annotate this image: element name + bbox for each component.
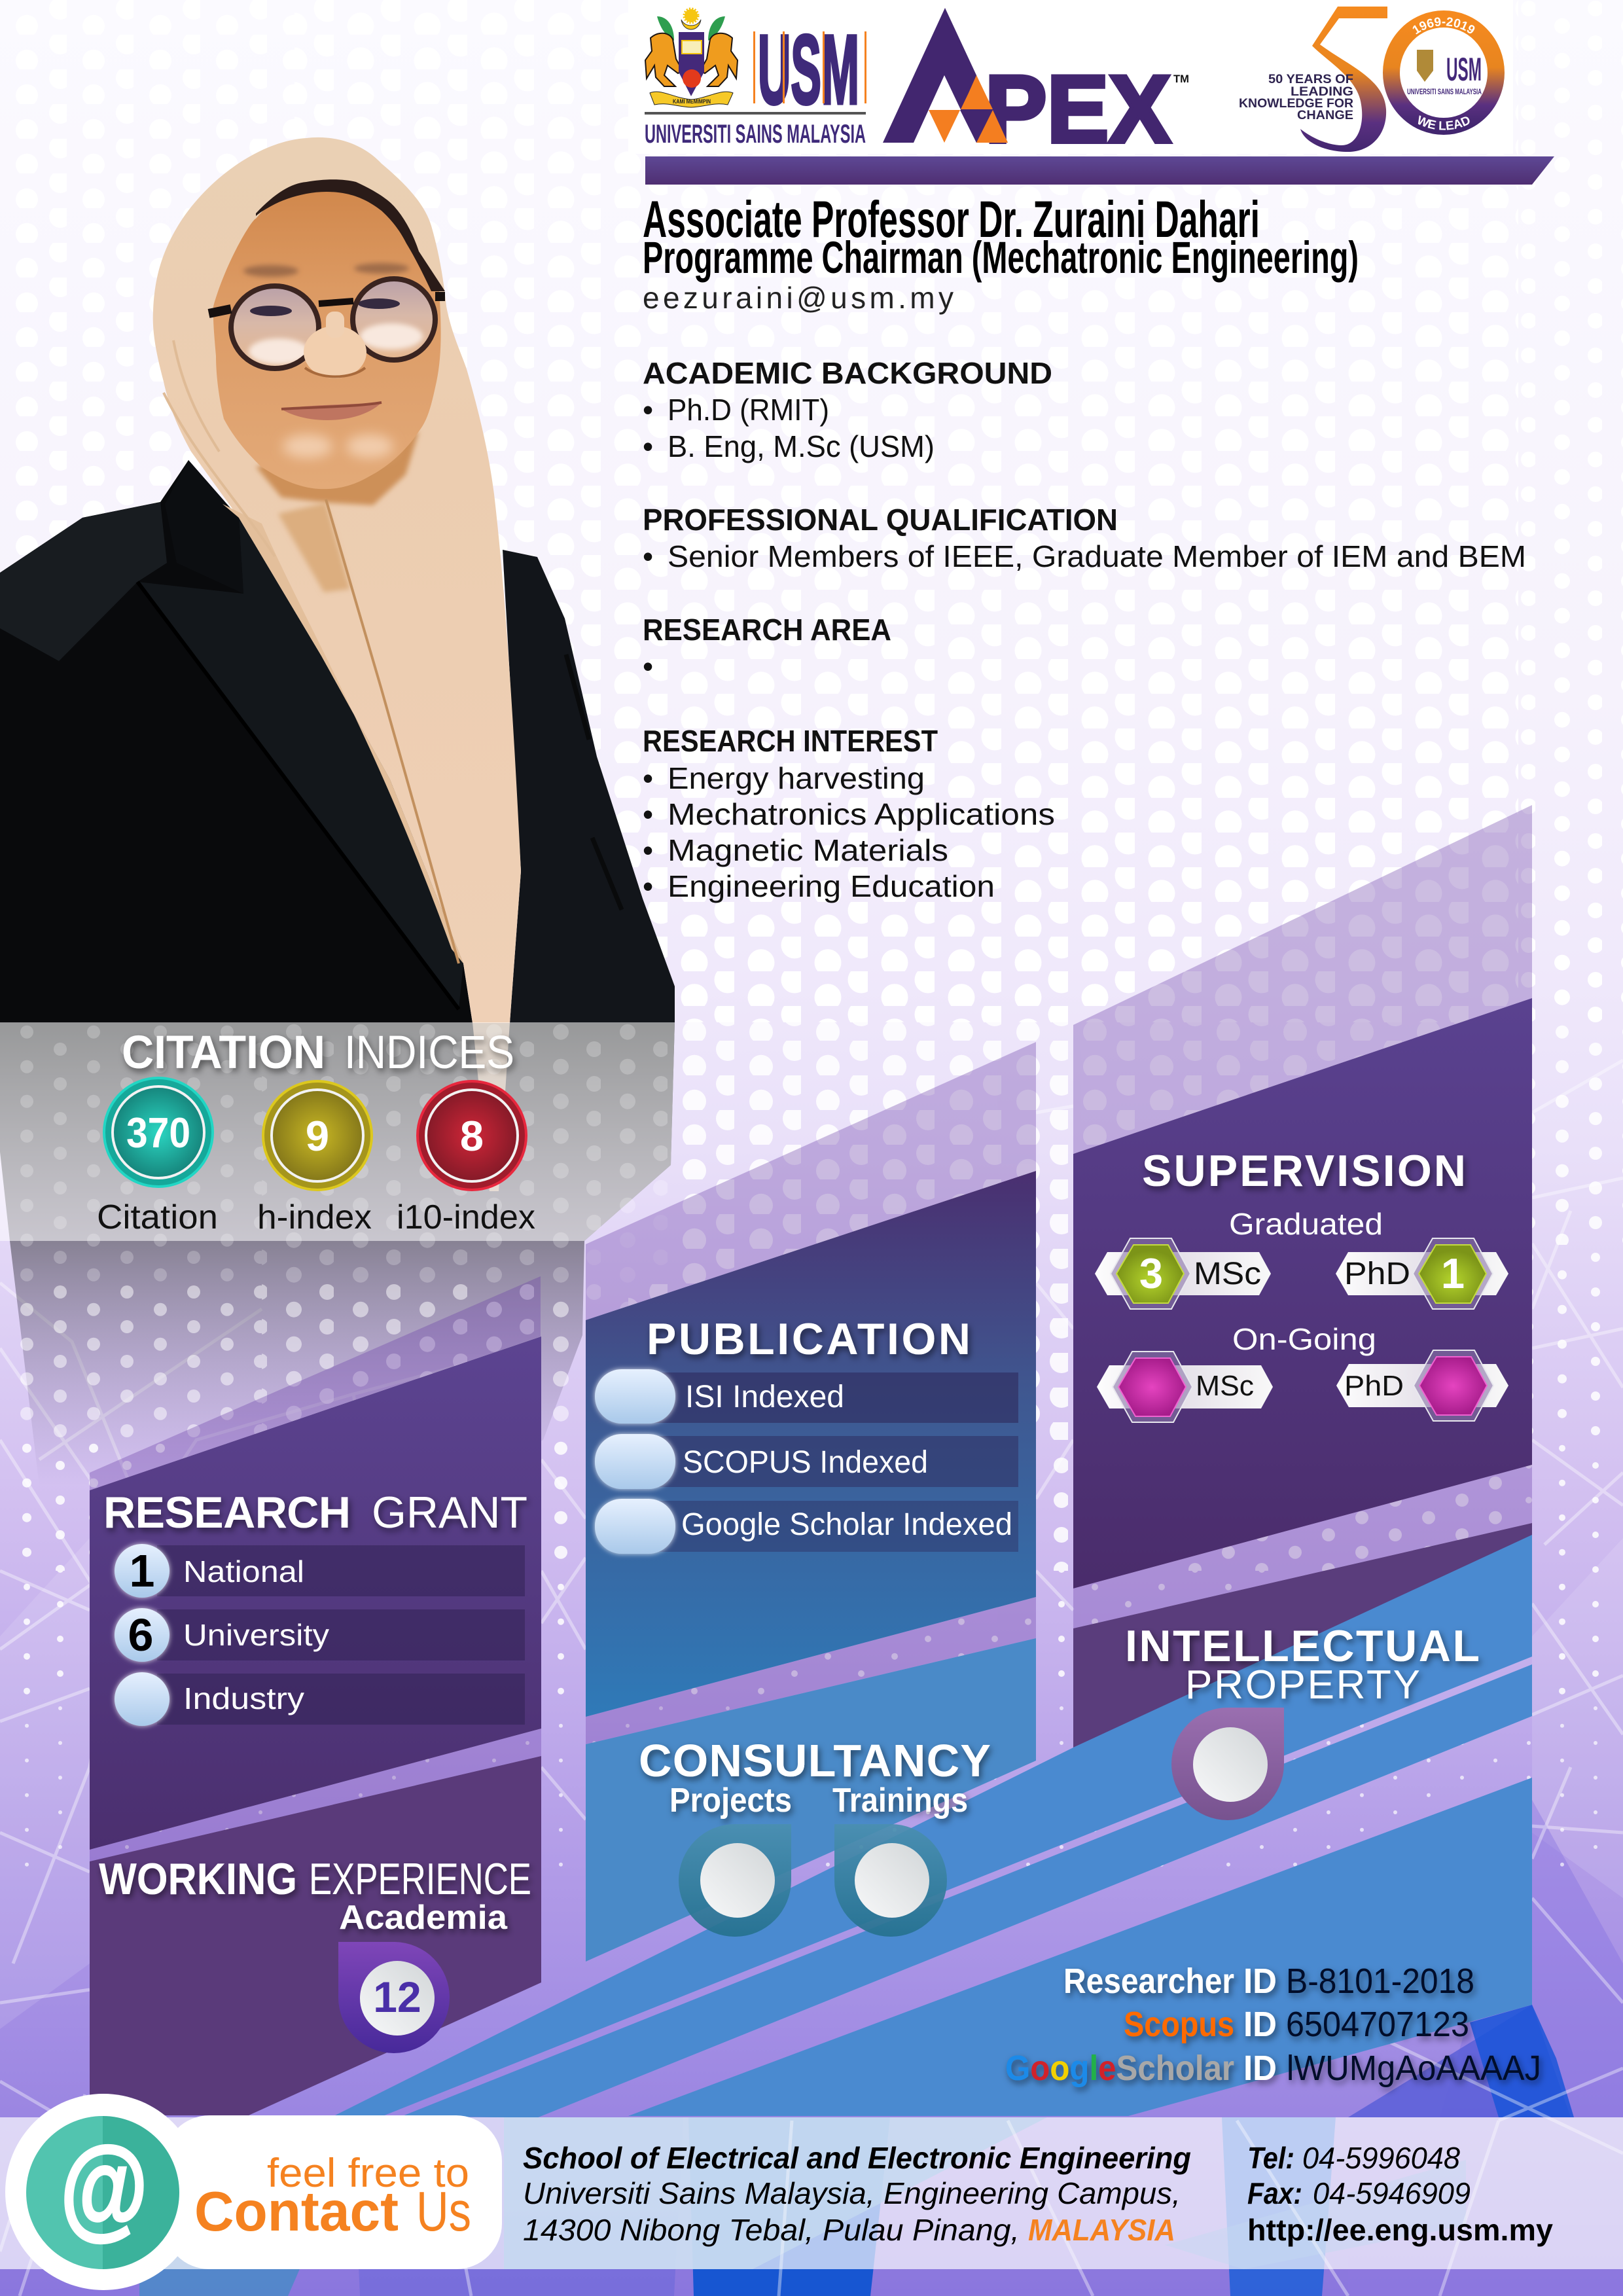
face highlights (283, 435, 393, 458)
header: 50 years logo: USM (1446, 51, 1482, 88)
panel: intellectual property background (1073, 1523, 1532, 1748)
research interest: • (643, 869, 653, 903)
research interest: Mechatronics Applications (668, 797, 1055, 831)
researcher ID (1063, 1962, 1474, 2001)
heading: research grant (103, 1488, 527, 1537)
row: industry (115, 1672, 525, 1726)
footer address: School of Electrical and Electronic Engineering (523, 2141, 1191, 2175)
inner black headband (256, 179, 445, 291)
row: Google Scholar indexed (595, 1499, 1018, 1554)
scopus ID: 6504707123 (1286, 2005, 1469, 2044)
header: 50 years logo: 50 YEARS OF (1268, 73, 1353, 86)
badge: graduated PhD: PhD (1344, 1257, 1410, 1291)
header: USM wordmark: UNIVERSITI SAINS MALAYSIA (645, 120, 866, 149)
right tiger (700, 33, 738, 86)
badge: graduated PhD (1336, 1238, 1508, 1309)
panel: working experience background (90, 1756, 541, 2115)
google scholar ID: ID (1243, 2049, 1277, 2088)
panel: citation indices band (0, 1022, 675, 1241)
header: 50 years logo: UNIVERSITI SAINS MALAYSIA (1407, 87, 1482, 96)
medal: citation (104, 1078, 213, 1187)
heading: intellectual property (1125, 1621, 1480, 1708)
footer contact details (1247, 2141, 1553, 2247)
working experience content (99, 1854, 531, 2053)
heading: supervision: SUPERVISION (1142, 1146, 1466, 1196)
academic background: ACADEMIC BACKGROUND (643, 356, 1052, 390)
jacket (0, 460, 675, 1023)
footer address (523, 2141, 1191, 2247)
medal: citation: 370 (126, 1109, 190, 1157)
name and title (643, 190, 1359, 315)
footer address: MALAYSIA (1028, 2213, 1175, 2247)
badge: trainings (834, 1824, 947, 1937)
translucent diagonal overlays (90, 805, 1532, 1861)
google scholar ID: GoogleScholar (1005, 2049, 1234, 2088)
citation labels: i10-index (397, 1198, 535, 1236)
panel: supervision background (1073, 998, 1532, 1588)
heading: working experience: WORKING (99, 1854, 297, 1904)
footer contact details: 04-5946909 (1313, 2176, 1471, 2210)
researcher ID: B-8101-2018 (1286, 1962, 1474, 2001)
row: national (115, 1544, 525, 1598)
badge: graduated PhD: 1 (1441, 1249, 1465, 1297)
portrait (0, 137, 675, 1023)
header: APEX logo: TM (1173, 73, 1189, 85)
heading: working experience (99, 1854, 531, 1904)
header: 50 years logo: 1969-2019 (1412, 17, 1475, 34)
row: university: University (183, 1618, 329, 1652)
research area (643, 613, 891, 683)
research interest (643, 724, 1055, 903)
professional qualification (643, 503, 1526, 573)
academic background: Ph.D (RMIT) (668, 393, 829, 427)
heading: citation indices: INDICES (344, 1027, 514, 1079)
eyebrows (243, 263, 409, 277)
badge: on-going MSc (1097, 1352, 1273, 1422)
blue diagonal strip C (628, 1778, 1532, 2116)
contact badge (5, 2094, 502, 2290)
panel: research grant background (90, 1336, 541, 1850)
footer contact details: Fax: (1247, 2176, 1302, 2210)
heading: intellectual property: PROPERTY (1185, 1662, 1420, 1708)
badge: projects (679, 1824, 791, 1937)
google scholar ID (1005, 2049, 1541, 2088)
citation labels: Citation (97, 1198, 218, 1236)
research interest: Magnetic Materials (668, 833, 948, 867)
badge: graduated MSc (1095, 1238, 1271, 1309)
header bar (645, 156, 1554, 185)
research area: RESEARCH AREA (643, 613, 891, 647)
heading: intellectual property: INTELLECTUAL (1125, 1621, 1480, 1671)
neck shadow (256, 431, 459, 963)
header: 50 years logo: KNOWLEDGE FOR (1239, 97, 1353, 111)
research grant content (103, 1488, 527, 1726)
medal: i10-index (418, 1081, 526, 1190)
header: 50 years logo: LEADING (1291, 85, 1353, 99)
professional qualification: Senior Members of IEEE, Graduate Member of IEM and BEM (668, 539, 1526, 573)
background web lines (0, 1060, 1623, 2296)
footer address: 14300 Nibong Tebal, Pulau Pinang, (523, 2213, 1020, 2247)
row: ISI indexed (595, 1369, 1018, 1424)
intellectual property content (1125, 1621, 1480, 1820)
header: APEX logo (883, 8, 1189, 162)
badge: on-going PhD: PhD (1344, 1370, 1404, 1402)
icon: at sign: @ (60, 2124, 148, 2250)
badge: on-going MSc: MSc (1196, 1370, 1254, 1402)
row: ISI indexed: ISI Indexed (685, 1380, 844, 1414)
researcher ID: Researcher (1063, 1962, 1234, 2001)
glasses (209, 279, 445, 368)
research area: • (643, 649, 653, 683)
row: national: National (183, 1554, 304, 1588)
publication content (595, 1314, 1018, 1554)
medal: i10-index: 8 (460, 1112, 484, 1160)
header: 50 years logo (1239, 7, 1505, 152)
footer address: Universiti Sains Malaysia, Engineering Campus, (523, 2176, 1181, 2210)
footer band (0, 2117, 1623, 2269)
row: SCOPUS indexed: SCOPUS Indexed (683, 1445, 928, 1480)
research interest: • (643, 833, 653, 867)
row: industry: Industry (183, 1681, 304, 1715)
heading: research grant: GRANT (372, 1488, 527, 1537)
citation labels: h-index (257, 1198, 372, 1236)
badge: academia years: 12 (373, 1973, 421, 2021)
scopus ID: ID (1243, 2005, 1277, 2044)
row: SCOPUS indexed (595, 1434, 1018, 1489)
footer contact details: http://ee.eng.usm.my (1247, 2213, 1553, 2247)
name and title: eezuraini@usm.my (643, 281, 954, 315)
scopus ID: Scopus (1124, 2005, 1234, 2044)
header: 50 years logo: WE LEAD (1418, 115, 1470, 130)
supervision content: Graduated (1229, 1207, 1383, 1241)
left tiger (645, 33, 683, 86)
header: USM crest (645, 9, 738, 107)
working experience content: Academia (339, 1899, 508, 1937)
heading: working experience: EXPERIENCE (309, 1854, 531, 1904)
hijab (153, 137, 521, 1023)
faded jacket below portrait (0, 1022, 675, 1486)
contact text: Us (416, 2181, 471, 2243)
heading: citation indices (122, 1027, 514, 1079)
consultancy content (639, 1735, 991, 1937)
row: university: 6 (128, 1609, 153, 1660)
contact text (194, 2151, 471, 2243)
badge: intellectual property (1171, 1708, 1284, 1820)
blue diagonal strip B (402, 1664, 1532, 2118)
header: USM crest: KAMI MEMIMPIN (673, 98, 711, 105)
google scholar ID: lWUMgAoAAAAJ (1287, 2049, 1541, 2088)
heading: research grant: RESEARCH (103, 1488, 351, 1537)
white logo backing (628, 0, 1513, 154)
header: APEX logo: PEX (985, 56, 1171, 162)
background low-poly facets (0, 1538, 1623, 2296)
text: USM (758, 14, 859, 124)
face (213, 182, 441, 489)
row: national: 1 (130, 1545, 154, 1596)
badge: graduated MSc: 3 (1139, 1249, 1163, 1297)
supervision content: On-Going (1232, 1322, 1376, 1356)
consultancy content: Trainings (832, 1782, 968, 1820)
heading: citation indices: CITATION (122, 1027, 325, 1079)
research interest: Energy harvesting (668, 761, 925, 795)
header: 50 years logo: CHANGE (1297, 109, 1353, 122)
researcher ID: ID (1243, 1962, 1277, 2001)
scopus ID (1124, 2005, 1469, 2044)
citation labels (97, 1198, 535, 1236)
blue diagonal strip A (334, 1535, 1532, 2116)
research interest: RESEARCH INTEREST (643, 724, 938, 758)
badge: graduated MSc: MSc (1194, 1257, 1261, 1291)
consultancy content: Projects (669, 1782, 792, 1820)
academic background: • (643, 429, 653, 463)
contact text: Contact (194, 2181, 399, 2243)
badge: on-going PhD (1336, 1350, 1508, 1421)
supervision content (1095, 1146, 1508, 1422)
footer contact details: 04-5996048 (1302, 2141, 1460, 2175)
badge: academia years (338, 1942, 450, 2053)
research interest: Engineering Education (668, 869, 995, 903)
academic background: • (643, 393, 653, 427)
heading: consultancy: CONSULTANCY (639, 1735, 991, 1786)
academic background: B. Eng, M.Sc (USM) (668, 429, 935, 463)
contact text: feel free to (267, 2151, 469, 2196)
panel: consultancy background (586, 1638, 1036, 1962)
medal: h-index: 9 (306, 1112, 329, 1160)
footer contact details: Tel: (1247, 2141, 1294, 2175)
row: Google Scholar indexed: Google Scholar Indexed (681, 1507, 1012, 1542)
medal: h-index (263, 1081, 372, 1190)
row: university (115, 1608, 525, 1662)
name and title: Associate Professor Dr. Zuraini Dahari (643, 190, 1260, 248)
header: USM wordmark (645, 14, 866, 149)
researcher identifiers (1005, 1962, 1541, 2088)
research interest: • (643, 797, 653, 831)
nose and mouth (281, 312, 382, 420)
heading: publication: PUBLICATION (647, 1314, 971, 1364)
professional qualification: PROFESSIONAL QUALIFICATION (643, 503, 1118, 537)
research interest: • (643, 761, 653, 795)
academic background (643, 356, 1052, 463)
professional qualification: • (643, 539, 653, 573)
panel: publication background (586, 1171, 1036, 1717)
